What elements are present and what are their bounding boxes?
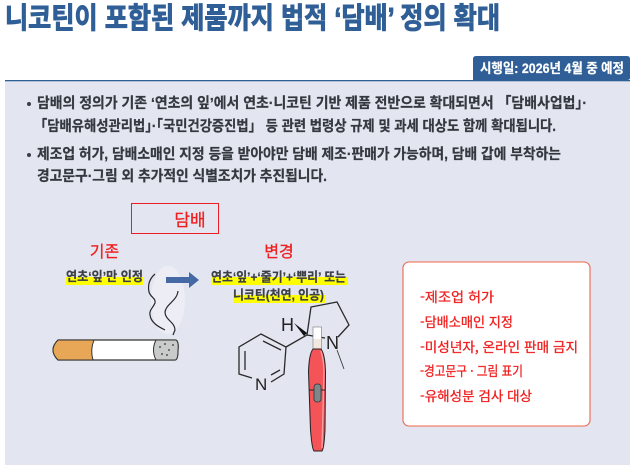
chart: nicotine structure: H (281, 315, 294, 335)
label: after definition: 니코틴(천연, 인공) (233, 288, 324, 302)
panel: requirements list: -미성년자, 온라인 판매 금지 (420, 336, 578, 356)
panel: requirements list: -경고문구 · 그림 표기 (420, 360, 523, 380)
badge: effective date: 시행일: 2026년 4월 중 예정 (480, 60, 624, 76)
label: after: 변경 (264, 238, 294, 262)
icon: cigarette (53, 340, 178, 360)
panel: requirements list: -담배소매인 지정 (420, 311, 513, 331)
text block: bullets: 담배의 정의가 기존 ‘연초의 잎’에서 연초·니코틴 기반 제품 전반으로 확대되면서 「담배사업법」· (37, 95, 587, 112)
text block: bullets (27, 95, 587, 185)
box: tobacco heading: 담배 (174, 206, 206, 231)
text block: bullets: 「담배유해성관리법」·「국민건강증진법」 등 관련 법령상 규제 및 과세 대상도 함께 확대됩니다. (34, 118, 556, 135)
badge: effective date (473, 56, 630, 81)
box: tobacco heading (132, 204, 218, 234)
chart: nicotine structure: N (326, 333, 339, 353)
label: before definition: 연초‘잎’만 인정 (66, 269, 143, 284)
label: before: 기존 (90, 238, 119, 262)
panel: requirements list (403, 262, 590, 426)
title: 니코틴이 포함된 제품까지 법적 ‘담배’ 정의 확대 (5, 2, 500, 35)
chart: nicotine structure: N (255, 375, 267, 394)
arrow: before to after (166, 272, 199, 288)
text block: bullets: 경고문구·그림 외 추가적인 식별조치가 추진됩니다. (37, 168, 327, 185)
text block: bullets: 제조업 허가, 담배소매인 지정 등을 받아야만 담배 제조·판매가 가능하며, 담배 갑에 부착하는 (37, 146, 561, 163)
panel: requirements list: -유해성분 검사 대상 (420, 385, 532, 405)
label: after definition (211, 270, 348, 303)
panel: requirements list: -제조업 허가 (420, 286, 494, 306)
label: after definition: 연초‘잎’+‘줄기’+‘뿌리’ 또는 (211, 270, 346, 284)
icon: smoke (149, 266, 185, 335)
icon: heated tobacco device (308, 327, 326, 451)
chart: nicotine structure (239, 302, 349, 394)
